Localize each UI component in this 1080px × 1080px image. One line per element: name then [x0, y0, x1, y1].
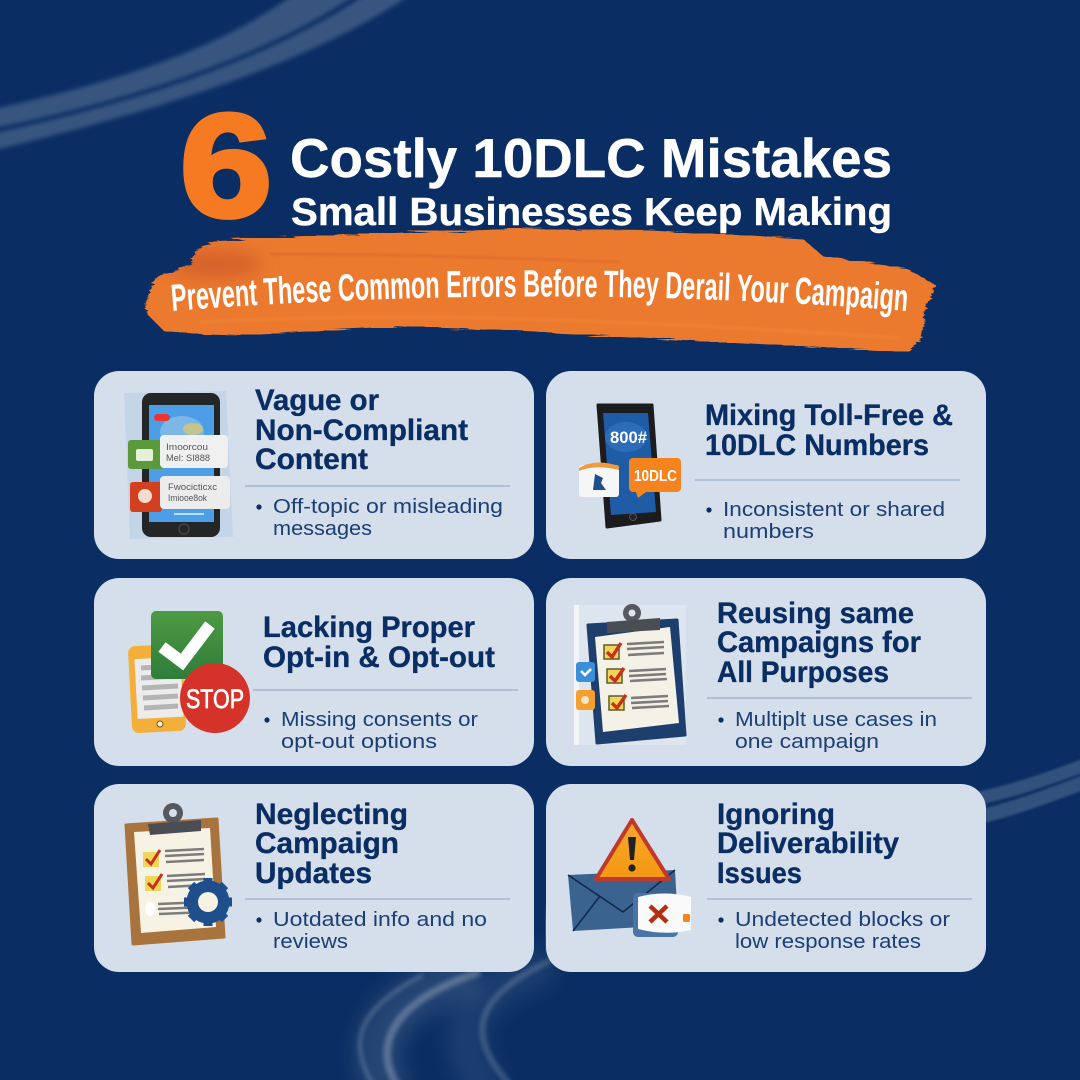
bullet text — [256, 908, 487, 953]
background swirl: top left — [0, 0, 410, 150]
panel: lacking proper opt-in and opt-out — [94, 578, 534, 766]
heading: Deliverability — [717, 827, 899, 860]
icon: phone with message cards: Imiooe8ok — [168, 493, 207, 503]
bullet text — [706, 498, 945, 543]
background swirl: bottom — [360, 905, 552, 1080]
icon: clipboard checklist — [574, 604, 686, 745]
banner: orange brush stroke — [144, 228, 936, 352]
icon: phone with message cards: Imoorcou — [166, 442, 208, 452]
bullet text: numbers — [723, 520, 814, 543]
bullet text — [718, 908, 950, 953]
heading: Opt-in & Opt-out — [263, 641, 495, 674]
heading: Vague or — [255, 384, 379, 417]
bullet text: Inconsistent or shared — [723, 498, 945, 521]
bullet text — [264, 708, 478, 753]
heading: 10DLC Numbers — [705, 429, 929, 462]
panel: ignoring deliverability issues — [546, 784, 986, 972]
icon: phone with message cards: Fwocicticxc — [168, 482, 218, 492]
bullet text: opt-out options — [281, 730, 437, 753]
heading — [263, 611, 495, 674]
heading: All Purposes — [717, 656, 889, 689]
icon: envelope with warning triangle — [568, 820, 691, 937]
heading: Neglecting — [255, 798, 408, 831]
heading: Issues — [717, 857, 802, 890]
bullet text: low response rates — [735, 930, 921, 953]
bullet text: Off-topic or misleading — [273, 495, 503, 518]
icon: phone with message cards — [124, 391, 233, 539]
bullet text: Multiplt use cases in — [735, 708, 937, 731]
panel: mixing toll-free and 10DLC numbers — [546, 371, 986, 559]
heading: Ignoring — [717, 798, 835, 831]
icon: clipboard with gear — [126, 803, 232, 944]
bullet text: one campaign — [735, 730, 879, 753]
background swirl: right — [975, 765, 1080, 818]
heading: Non-Compliant — [255, 414, 468, 447]
bullet text: Undetected blocks or — [735, 908, 950, 931]
title: Costly 10DLC Mistakes — [290, 127, 892, 189]
banner text: Prevent These Common Errors Before They Derail Your Campaign — [172, 269, 907, 318]
heading — [255, 384, 468, 476]
bullet text: reviews — [273, 930, 348, 953]
bullet text: Uotdated info and no — [273, 908, 487, 931]
icon: phone with message cards: Mel: SI888 — [166, 453, 210, 463]
icon: phone with 800# and 10DLC tags — [579, 405, 681, 527]
heading — [255, 798, 408, 890]
icon: phone with 800# and 10DLC tags: 800# — [610, 429, 647, 447]
heading: Updates — [255, 857, 372, 890]
heading: Campaign — [255, 827, 399, 860]
icon: check mark and stop sign — [128, 611, 250, 733]
panel: reusing same campaigns — [546, 578, 986, 766]
heading — [717, 597, 921, 689]
bullet text — [256, 495, 503, 540]
title: number 6: 6 — [180, 84, 272, 247]
bullet text: messages — [273, 517, 372, 540]
heading: Content — [255, 443, 368, 476]
heading: Reusing same — [717, 597, 914, 630]
icon: check mark and stop sign: STOP — [186, 684, 244, 714]
heading: Mixing Toll-Free & — [705, 399, 953, 432]
icon: phone with 800# and 10DLC tags: 10DLC — [634, 468, 677, 485]
heading: Campaigns for — [717, 626, 921, 659]
bullet text: Missing consents or — [281, 708, 478, 731]
subtitle: Small Businesses Keep Making — [291, 191, 892, 234]
panel: vague or non-compliant content — [94, 371, 534, 559]
heading: Lacking Proper — [263, 611, 475, 644]
heading — [717, 798, 899, 890]
heading — [705, 399, 953, 462]
panel: neglecting campaign updates — [94, 784, 534, 972]
bullet text — [718, 708, 937, 753]
